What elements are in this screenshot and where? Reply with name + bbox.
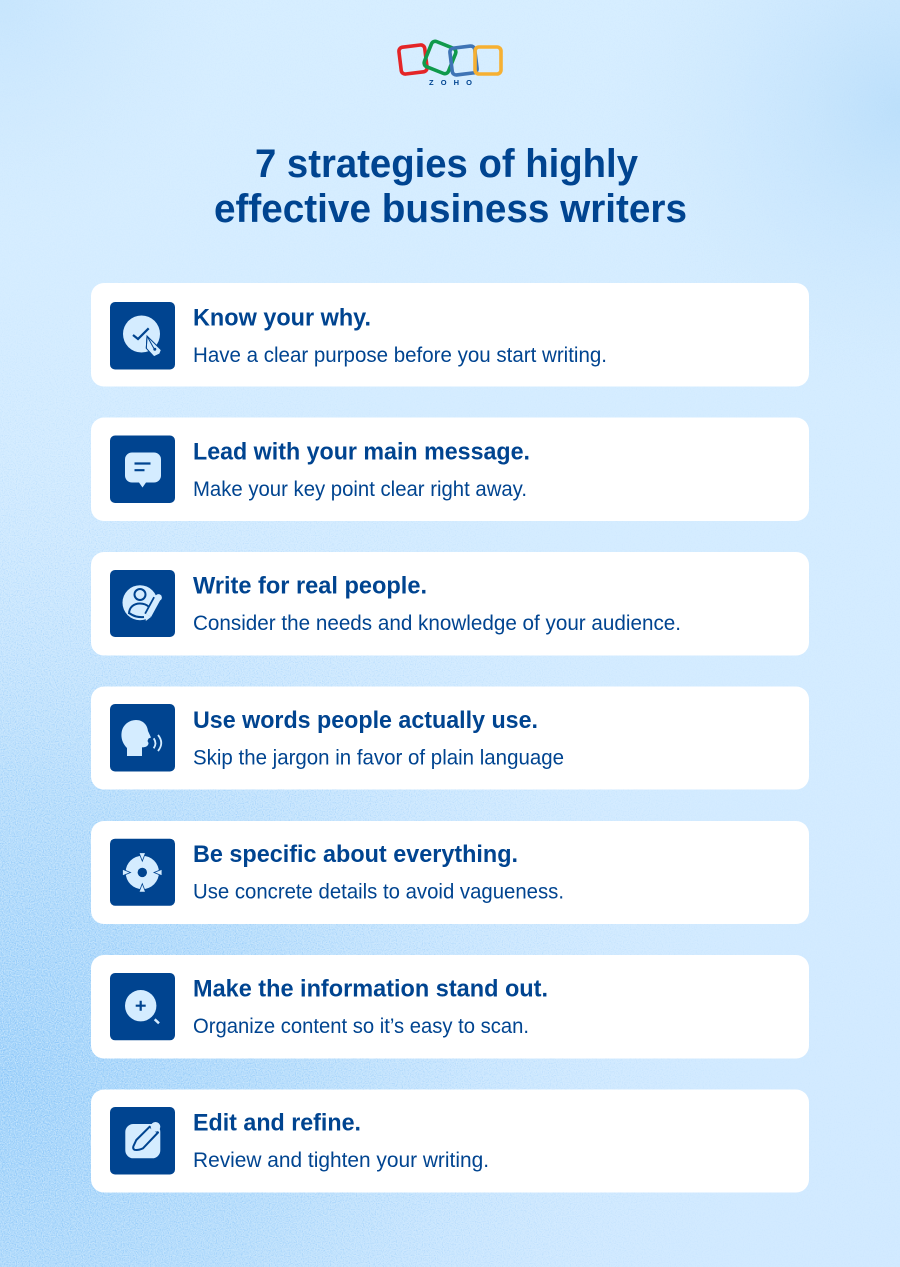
logo: Zoho: ZOHO [429, 78, 472, 87]
heading: Know your why. [193, 304, 371, 332]
icon: speech bubble [110, 436, 175, 503]
heading: Use words people actually use. [193, 707, 538, 734]
icon: magnifier [110, 973, 175, 1040]
title: effective business writers [214, 187, 687, 231]
panel: be specific [91, 821, 809, 924]
heading: Write for real people. [193, 572, 427, 600]
panel: edit and refine [91, 1090, 809, 1192]
description: Review and tighten your writing. [193, 1149, 489, 1172]
icon: check mark with pen [110, 302, 175, 370]
heading: Edit and refine. [193, 1110, 361, 1136]
panel: use words people use [91, 686, 809, 790]
description: Consider the needs and knowledge of your audience. [193, 612, 681, 635]
heading: Lead with your main message. [193, 438, 530, 466]
description: Organize content so it’s easy to scan. [193, 1015, 529, 1038]
heading: Be specific about everything. [193, 841, 518, 868]
icon: speaking head [110, 704, 175, 772]
description: Use concrete details to avoid vagueness. [193, 880, 564, 904]
heading: Make the information stand out. [193, 976, 548, 1002]
panel: make information stand out [91, 955, 809, 1058]
panel: know your why [91, 283, 809, 386]
title: 7 strategies of highly [255, 142, 638, 186]
description: Have a clear purpose before you start writing. [193, 344, 607, 367]
description: Skip the jargon in favor of plain language [193, 746, 564, 770]
logo: Zoho [398, 40, 501, 87]
title [214, 142, 687, 231]
icon: target [110, 839, 175, 906]
panel: lead with main message [91, 418, 809, 521]
description: Make your key point clear right away. [193, 478, 527, 501]
icon: pen on note [110, 1107, 175, 1174]
icon: person with pencil [110, 570, 175, 637]
panel: write for real people [91, 552, 809, 656]
